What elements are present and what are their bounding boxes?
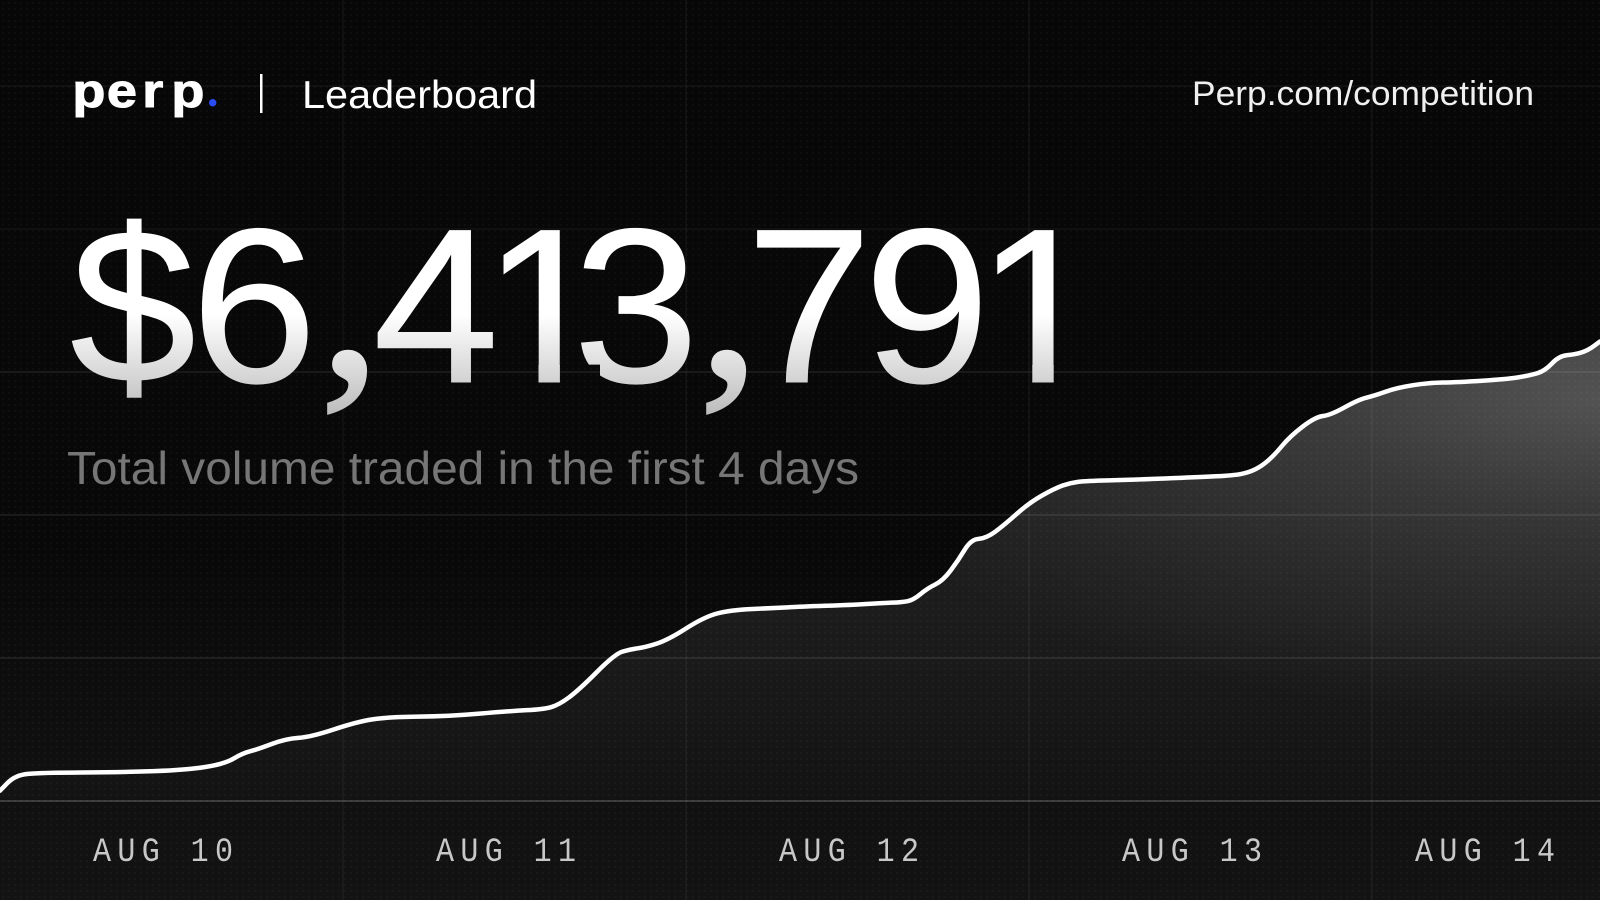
label: Aug 13: AUG 13: [1122, 832, 1262, 872]
volume line: [0, 342, 1600, 791]
label: Aug 11: AUG 11: [436, 832, 576, 872]
header: [72, 64, 1534, 117]
headline value: 791: [746, 184, 1102, 429]
subtitle: Total volume traded in the first 4 days: [67, 442, 859, 494]
logo: perp.: perp: [72, 64, 204, 117]
x-axis date labels: [93, 832, 1555, 872]
headline value: [72, 218, 1054, 415]
label: Aug 10: AUG 10: [93, 832, 233, 872]
headline value: ,: [698, 162, 760, 428]
headline value: 413: [373, 184, 699, 429]
heading: Leaderboard: Leaderboard: [302, 74, 537, 117]
label: Aug 14: AUG 14: [1415, 832, 1555, 872]
headline value: $6: [70, 184, 317, 429]
label: Aug 12: AUG 12: [779, 832, 919, 872]
headline value: ,: [319, 162, 381, 428]
area under curve: [0, 342, 1600, 801]
link: competition URL: Perp.com/competition: [1192, 75, 1534, 113]
header divider: [260, 74, 262, 113]
